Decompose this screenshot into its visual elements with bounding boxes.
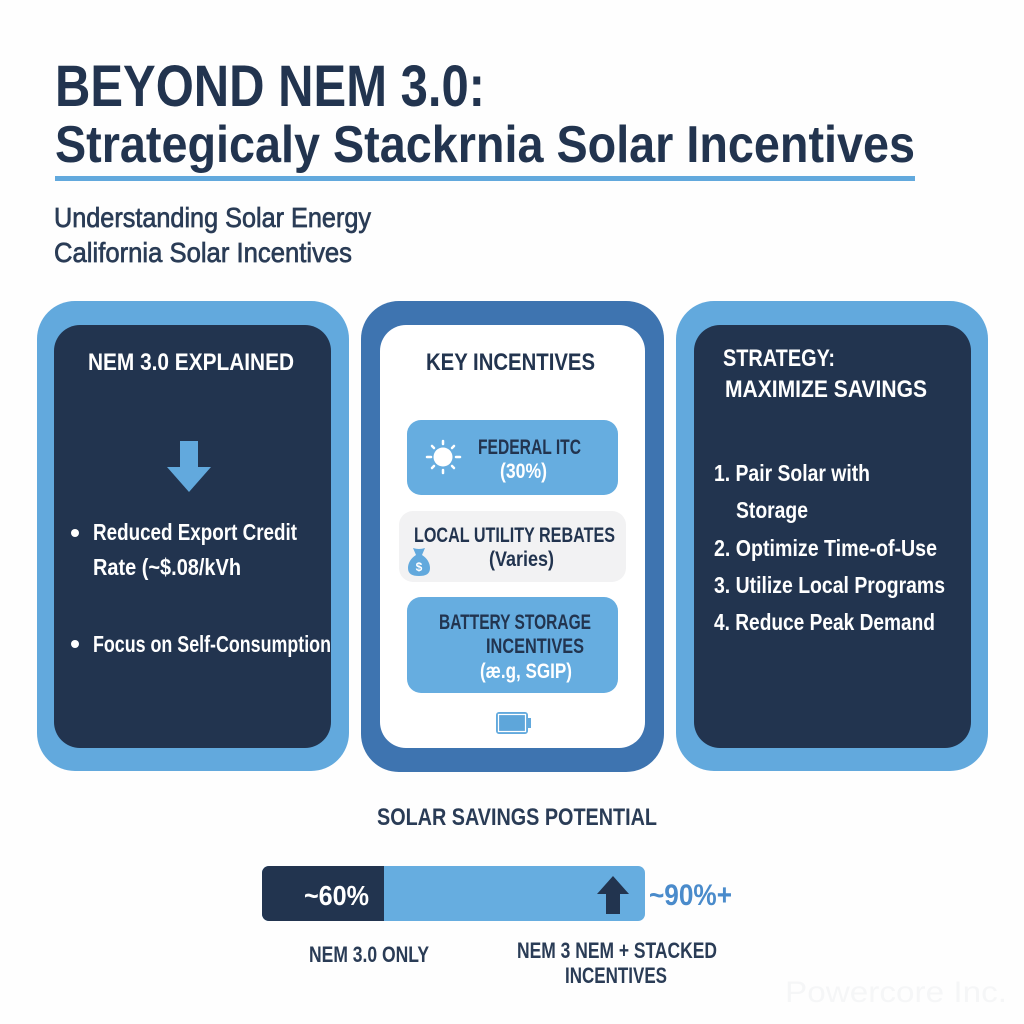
label: stacked incentives: INCENTIVES — [565, 963, 667, 988]
strategy list: Storage — [736, 497, 808, 523]
strategy list — [714, 460, 945, 635]
card: battery storage incentives: BATTERY STORAGE — [439, 611, 591, 634]
chart: savings bar — [262, 866, 732, 921]
label: NEM 3.0 only: NEM 3.0 ONLY — [309, 942, 429, 967]
bullet: reduced export credit: Reduced Export Credit — [93, 519, 297, 545]
panel heading: strategy — [723, 345, 927, 403]
card: local utility rebates: (Varies) — [489, 548, 554, 571]
card: federal ITC: FEDERAL ITC — [478, 436, 581, 459]
card: battery storage incentives: (æ.g, SGIP) — [480, 660, 572, 683]
card: local utility rebates: LOCAL UTILITY REBATES — [414, 524, 615, 547]
panel: NEM 3.0 explained — [37, 301, 349, 771]
strategy list: 2. Optimize Time-of-Use — [714, 535, 937, 561]
subtitle: Understanding Solar Energy — [54, 202, 371, 233]
icon: up arrow — [597, 876, 629, 914]
strategy list: 4. Reduce Peak Demand — [714, 609, 935, 635]
icon: down arrow — [167, 441, 211, 492]
label: stacked incentives — [517, 938, 717, 988]
title: Strategicaly Stackrnia Solar Incentives — [55, 116, 915, 174]
card: battery storage incentives: INCENTIVES — [486, 635, 584, 658]
bullet: reduced export credit — [71, 519, 297, 580]
subtitle: California Solar Incentives — [54, 237, 352, 268]
panel heading: key incentives: KEY INCENTIVES — [426, 349, 595, 376]
strategy list: 3. Utilize Local Programs — [714, 572, 945, 598]
strategy list: 1. Pair Solar with — [714, 460, 870, 486]
value: 60 percent: ~60% — [304, 880, 369, 911]
icon: sun — [427, 441, 460, 473]
bullet: self-consumption: Focus on Self-Consumption — [93, 631, 331, 657]
watermark: Powercore Inc. — [785, 976, 1007, 1009]
value: 90 percent plus: ~90%+ — [649, 879, 732, 912]
card: federal ITC — [407, 420, 618, 495]
icon: battery — [497, 713, 531, 733]
card: local utility rebates — [399, 511, 626, 582]
bullet: reduced export credit: Rate (~$.08/kVh — [93, 554, 241, 580]
panel: key incentives — [361, 301, 664, 772]
subtitle — [54, 202, 371, 268]
card: federal ITC: (30%) — [500, 460, 547, 483]
label: stacked incentives: NEM 3 NEM + STACKED — [517, 938, 717, 963]
panel heading: NEM 3.0 explained: NEM 3.0 EXPLAINED — [88, 349, 294, 376]
panel: strategy — [676, 301, 988, 771]
icon: money bag — [408, 548, 430, 576]
panel heading: strategy: MAXIMIZE SAVINGS — [725, 376, 927, 403]
panel heading: strategy: STRATEGY: — [723, 345, 835, 372]
section heading: solar savings potential: SOLAR SAVINGS POTENTIAL — [377, 804, 657, 831]
icon: money bag: $ — [416, 560, 423, 574]
title: BEYOND NEM 3.0: — [55, 54, 485, 119]
card: battery storage incentives — [407, 597, 618, 693]
title — [55, 54, 915, 174]
